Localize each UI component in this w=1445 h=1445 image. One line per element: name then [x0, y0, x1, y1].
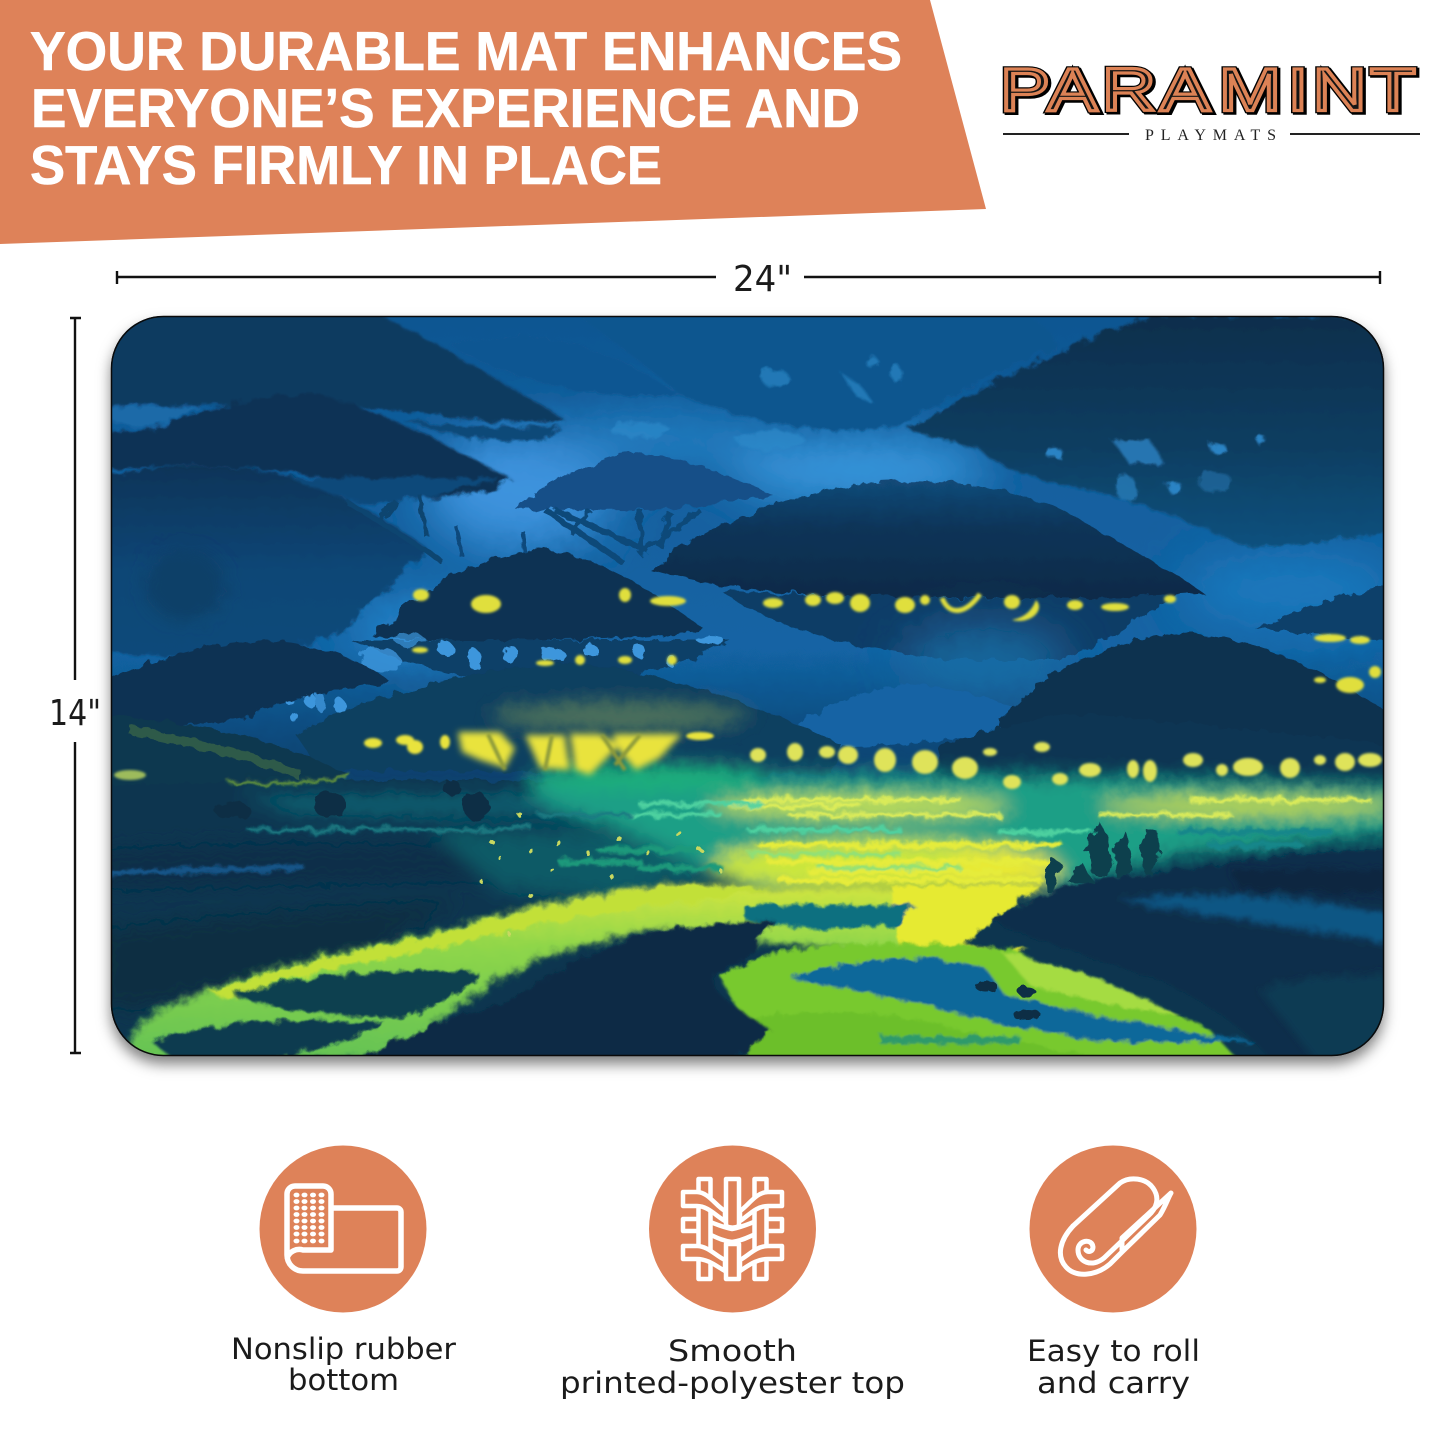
header banner [0, 0, 986, 244]
height dimension [49, 318, 101, 1053]
silhouettes [1046, 822, 1160, 892]
caption: easy roll [1027, 1334, 1200, 1400]
dark bottom patches [152, 845, 1400, 1066]
logo: PLAYMATS [1145, 127, 1276, 144]
logo: PARAMINT [1002, 59, 1418, 125]
struts under left canopy [345, 495, 440, 560]
large dome [650, 481, 1205, 598]
caption: nonslip: bottom [288, 1363, 399, 1397]
far canopies [450, 316, 1056, 430]
logo: PARAMINT [1000, 57, 1416, 124]
river streaks [111, 776, 1370, 880]
ground boulders [214, 780, 1041, 1021]
ground [112, 778, 1383, 1048]
top right canopy [908, 316, 1400, 547]
caption: easy roll: Easy to roll [1027, 1334, 1200, 1368]
caption: smooth [560, 1334, 905, 1400]
lower stream [130, 883, 1040, 1062]
icon: rubber mat [260, 1146, 426, 1312]
caption: nonslip [231, 1332, 456, 1397]
underside struts [720, 590, 1175, 660]
window lights [412, 588, 1381, 693]
sparkles [478, 812, 722, 937]
left dome [372, 549, 705, 640]
caption: easy roll: and carry [1037, 1366, 1190, 1400]
spikes above left dome [455, 525, 525, 560]
headline: EVERYONE’S EXPERIENCE AND [31, 77, 860, 139]
sky glow [350, 415, 1400, 658]
top-left canopies [90, 310, 565, 505]
left mass [90, 465, 430, 656]
caption: smooth: printed-polyester top [560, 1366, 905, 1400]
icon: woven polyester [649, 1146, 816, 1312]
headline: STAYS FIRMLY IN PLACE [30, 134, 662, 196]
mid-lower domes [112, 585, 1383, 786]
logo: PARAMINT [1000, 57, 1416, 124]
width dimension: 24" [733, 259, 792, 300]
height dimension: 14" [49, 693, 101, 734]
glowing river [520, 763, 1400, 895]
width dimension [117, 259, 1380, 300]
headline: YOUR DURABLE MAT ENHANCES [30, 20, 902, 82]
headline [30, 20, 902, 196]
ground tonal patches [100, 795, 720, 1010]
playmat [90, 300, 1405, 1075]
caption: nonslip: Nonslip rubber [231, 1332, 456, 1366]
icon: rolled mat [1030, 1146, 1196, 1312]
rear canopy [513, 453, 772, 560]
caption: smooth: Smooth [668, 1334, 797, 1368]
